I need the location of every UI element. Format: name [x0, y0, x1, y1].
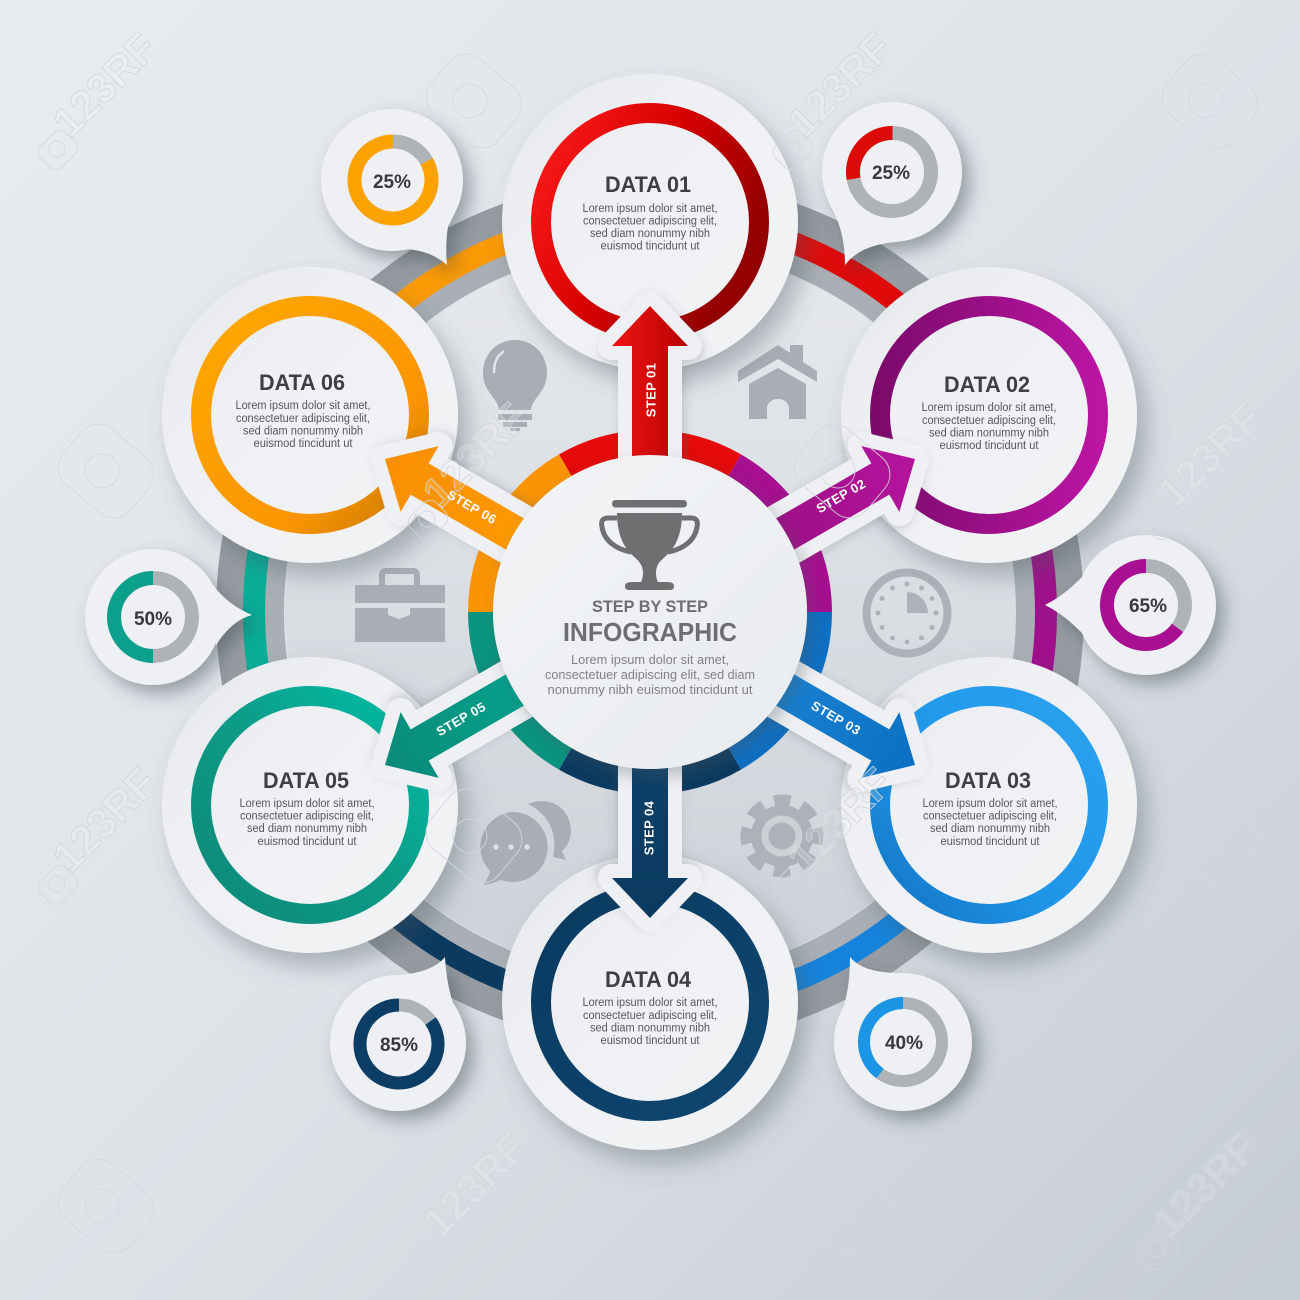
callout: 40% blue [834, 957, 972, 1111]
callout: 25% orange: 25% [373, 172, 411, 193]
centre text block: Lorem ipsum dolor sit amet, [571, 652, 729, 667]
callout: 50% teal [85, 549, 252, 685]
panel: data 06 [162, 267, 458, 563]
callout: 25% red [822, 102, 962, 265]
text: data 05 [240, 768, 374, 848]
text: data 05: sed diam nonummy nibh [247, 823, 367, 835]
watermarks: 123RF [779, 24, 901, 146]
arrow: step 04 [612, 612, 688, 918]
text: data 06: sed diam nonummy nibh [243, 426, 363, 438]
text: data 03: DATA 03 [945, 768, 1031, 793]
arrow: step 06 [366, 426, 669, 645]
callout: 85% navy [330, 957, 466, 1111]
arrow labels [434, 363, 868, 855]
arrow labels: STEP 01 [644, 363, 658, 417]
arrow labels: STEP 04 [642, 800, 656, 855]
text: data 02: DATA 02 [944, 372, 1030, 397]
icon: chat bubbles [480, 801, 571, 885]
text: data 04: consectetuer adipiscing elit, [583, 1010, 717, 1022]
watermarks: 123RF [1144, 1124, 1266, 1246]
text: data 04: Lorem ipsum dolor sit amet, [582, 997, 718, 1009]
text: data 05: Lorem ipsum dolor sit amet, [240, 798, 374, 810]
arrow: step 02 [631, 426, 934, 645]
text: data 06 [236, 370, 370, 450]
watermarks: 123RF [414, 394, 536, 516]
text: data 01: consectetuer adipiscing elit, [583, 216, 717, 228]
panel: data 04 [502, 854, 798, 1150]
central backing disc [285, 247, 1015, 977]
text: data 04: sed diam nonummy nibh [590, 1022, 710, 1034]
text: data 02: consectetuer adipiscing elit, [922, 415, 1056, 427]
arrow labels: STEP 05 [434, 699, 488, 739]
panel: data 05 [162, 657, 458, 953]
text: data 06: DATA 06 [259, 370, 345, 395]
callout: 40% blue: 40% [885, 1033, 923, 1054]
text: data 02: sed diam nonummy nibh [929, 428, 1049, 440]
icon: briefcase [355, 571, 445, 642]
watermarks: 123RF [779, 759, 901, 881]
icon: gear [740, 794, 824, 878]
text: data 06: euismod tincidunt ut [254, 438, 353, 450]
text: data 02 [922, 372, 1056, 452]
callout: 65% purple [1045, 535, 1216, 675]
arrow labels: STEP 03 [809, 698, 863, 738]
text: data 04: DATA 04 [605, 967, 692, 992]
callout: 65% purple: 65% [1129, 596, 1167, 617]
panel: data 02 [841, 267, 1137, 563]
watermarks: 123RF [414, 1124, 536, 1246]
arrow labels: STEP 02 [814, 476, 868, 516]
text: data 05: euismod tincidunt ut [258, 836, 357, 848]
icon: house [738, 345, 817, 419]
centre heading: STEP BY STEP [592, 597, 708, 616]
icon: clock [866, 572, 948, 654]
panel: data 01 [502, 74, 798, 370]
text: data 05: consectetuer adipiscing elit, [240, 810, 374, 822]
text: data 06: consectetuer adipiscing elit, [236, 413, 370, 425]
watermarks: 123RF [44, 24, 166, 146]
icon: trophy [602, 500, 697, 590]
text: data 05: DATA 05 [263, 768, 349, 793]
arrow: step 03 [631, 579, 934, 798]
text: data 03: Lorem ipsum dolor sit amet, [922, 798, 1058, 810]
watermarks: 123RF [1149, 394, 1271, 516]
text: data 03: sed diam nonummy nibh [930, 823, 1050, 835]
text: data 01: Lorem ipsum dolor sit amet, [582, 203, 718, 215]
centre text block [545, 652, 755, 697]
centre text block: consectetuer adipiscing elit, sed diam [545, 667, 755, 682]
text: data 02: euismod tincidunt ut [940, 440, 1039, 452]
panel: data 03 [841, 657, 1137, 953]
arrow: step 01 [612, 306, 688, 612]
centre disc [493, 455, 807, 769]
text: data 02: Lorem ipsum dolor sit amet, [922, 402, 1056, 414]
text: data 01: euismod tincidunt ut [600, 240, 700, 252]
callout: 85% navy: 85% [380, 1035, 418, 1056]
callout: 50% teal: 50% [134, 609, 172, 630]
text: data 01: sed diam nonummy nibh [590, 228, 710, 240]
centre heading [563, 597, 737, 647]
text: data 04: euismod tincidunt ut [600, 1035, 700, 1047]
text: data 01: DATA 01 [605, 172, 691, 197]
callout: 25% red: 25% [872, 163, 910, 184]
outer ring [230, 192, 1070, 1032]
arrow: step 05 [366, 579, 669, 798]
text: data 03 [922, 768, 1058, 848]
text: data 01 [582, 172, 718, 252]
watermarks: 123RF [44, 759, 166, 881]
text: data 03: euismod tincidunt ut [940, 836, 1040, 848]
icon: light bulb [483, 340, 547, 431]
text: data 04 [582, 967, 718, 1047]
arrow labels: STEP 06 [445, 487, 499, 527]
centre text block: nonummy nibh euismod tincidunt ut [548, 682, 753, 697]
callout: 25% orange [321, 109, 463, 265]
text: data 06: Lorem ipsum dolor sit amet, [236, 400, 370, 412]
centre heading: INFOGRAPHIC [563, 617, 737, 647]
text: data 03: consectetuer adipiscing elit, [923, 810, 1057, 822]
inner segmented ring [480, 443, 820, 781]
